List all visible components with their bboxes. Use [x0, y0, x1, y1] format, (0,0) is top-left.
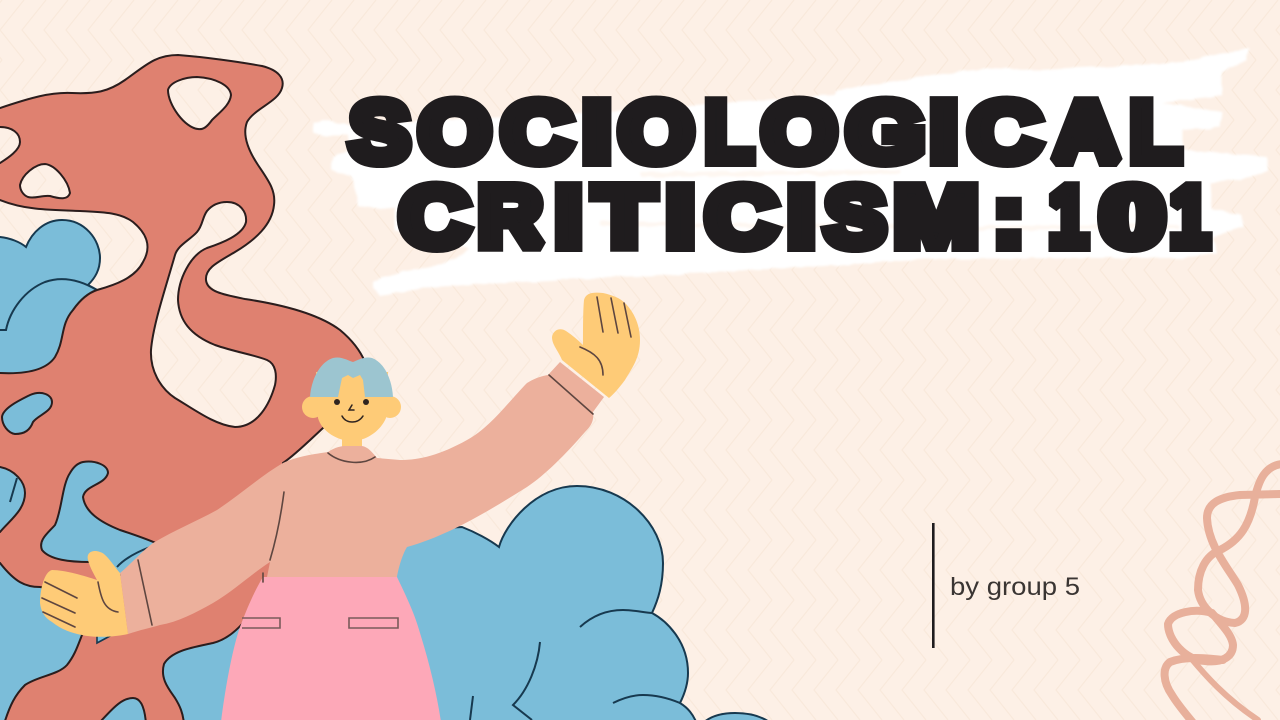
title: [350, 85, 1210, 265]
title: M: [894, 170, 978, 265]
title: C: [502, 85, 572, 180]
right hand: [552, 293, 640, 398]
red organic blob with cut-outs: [0, 55, 370, 720]
byline: by group 5: [950, 573, 1080, 601]
title: 0: [1100, 170, 1164, 265]
title: L: [705, 85, 753, 180]
person illustration: [40, 293, 640, 720]
skirt: [221, 577, 441, 720]
sweater with both arms: [120, 362, 604, 634]
peach squiggle: [1165, 464, 1280, 720]
title: C: [400, 170, 469, 265]
title: I: [930, 85, 958, 180]
title: 1: [1049, 170, 1088, 265]
white brush stroke behind title: [313, 48, 1268, 295]
hair: [310, 357, 393, 397]
left hand: [40, 551, 128, 637]
title: I: [788, 170, 815, 265]
title: 1: [1170, 170, 1210, 265]
title: R: [478, 170, 542, 265]
title: O: [619, 85, 694, 180]
skirt pockets: [242, 618, 398, 628]
title: S: [350, 85, 410, 180]
title: A: [1053, 85, 1119, 180]
title: C: [969, 85, 1041, 180]
title: G: [847, 85, 925, 180]
title: :: [993, 170, 1024, 265]
title: I: [555, 170, 582, 265]
title: S: [825, 170, 886, 265]
neck: [342, 430, 362, 449]
title: T: [594, 170, 655, 265]
title: O: [762, 85, 837, 180]
title: L: [1130, 85, 1181, 180]
title: O: [419, 85, 491, 180]
small blue notch below left hand: [97, 634, 110, 643]
title: I: [582, 85, 611, 180]
body and hand line details: [42, 297, 631, 627]
title: C: [706, 170, 777, 265]
title: I: [666, 170, 695, 265]
head: [302, 357, 401, 441]
vertical divider line: [932, 523, 935, 648]
face details: [334, 399, 340, 405]
blue cloud shapes: [0, 220, 772, 720]
